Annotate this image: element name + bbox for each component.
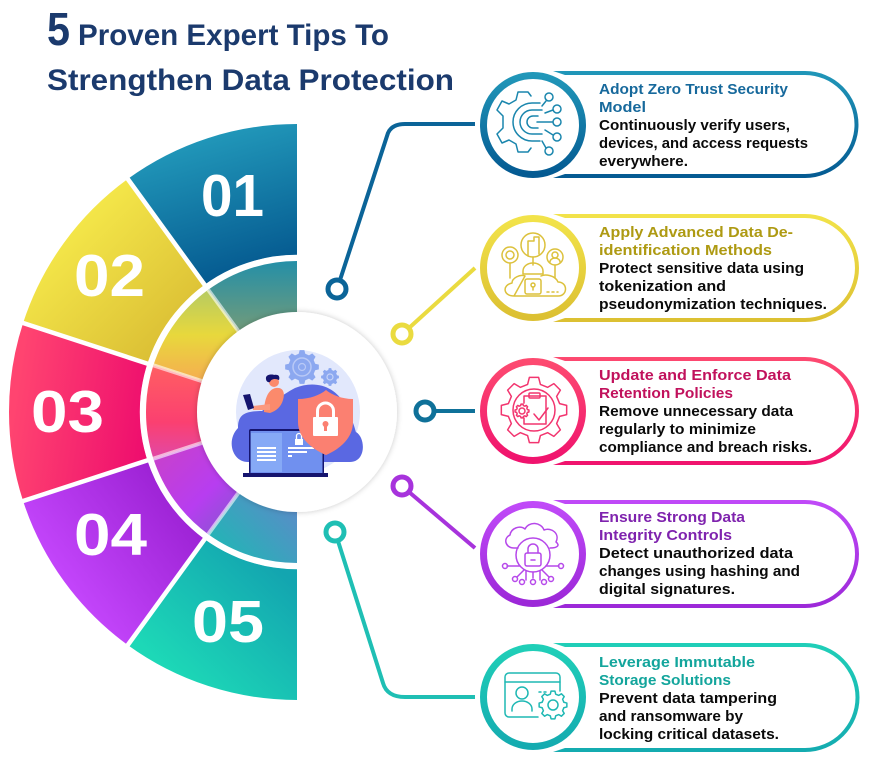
text: tip 4: Integrity Controls xyxy=(599,527,732,544)
icon: cloud lock network xyxy=(502,523,564,584)
center circle xyxy=(197,312,397,512)
text: tip 4: Ensure Strong Data xyxy=(599,509,746,526)
laptop xyxy=(249,429,324,474)
text: tip 5: Prevent data tampering xyxy=(599,690,777,707)
icon: cloud lock with data circles xyxy=(502,233,566,296)
segment 05: 05 xyxy=(192,589,264,655)
text: tip 5: Leverage Immutable xyxy=(599,654,755,671)
text: tip 1: everywhere. xyxy=(599,153,688,170)
text: tip 3: Update and Enforce Data xyxy=(599,367,792,384)
text: tip 4: Detect unauthorized data xyxy=(599,545,794,562)
icon: profile window with gear xyxy=(505,673,567,719)
panel: tip 2 de-identification xyxy=(484,214,859,322)
segment 01: 01 xyxy=(201,163,264,229)
panel: tip 4 data integrity xyxy=(484,500,859,608)
text: tip 1: Adopt Zero Trust Security xyxy=(599,81,789,98)
text: tip 4: digital signatures. xyxy=(599,581,735,598)
text: tip 5: and ransomware by xyxy=(599,708,744,725)
panel: tip 5 immutable storage xyxy=(484,643,859,752)
connector 5 xyxy=(326,523,475,697)
shield with padlock xyxy=(298,390,353,455)
text: tip 2: tokenization and xyxy=(599,278,726,295)
inner ring xyxy=(146,261,297,563)
text: tip 5 xyxy=(599,654,779,743)
segment 04: 04 xyxy=(74,502,147,568)
segment 03: 03 xyxy=(31,379,104,445)
title: Strengthen Data Protection xyxy=(47,64,454,97)
icon: gear circuit xyxy=(497,92,561,155)
segment 01 xyxy=(128,124,297,285)
connector 4 xyxy=(393,477,475,548)
connector 1 xyxy=(328,124,475,298)
connector 3 xyxy=(416,402,475,420)
text: tip 4 xyxy=(599,509,800,598)
text: tip 3: compliance and breach risks. xyxy=(599,439,812,456)
panel: tip 3 retention policies xyxy=(484,357,859,465)
semicircle chart xyxy=(9,124,397,700)
text: tip 4: changes using hashing and xyxy=(599,563,800,580)
text: tip 1: devices, and access requests xyxy=(599,135,808,152)
connector 2 xyxy=(393,268,475,343)
text: tip 2: pseudonymization techniques. xyxy=(599,296,827,313)
text: tip 3 xyxy=(599,367,812,456)
text: tip 2: Apply Advanced Data De- xyxy=(599,224,793,241)
text: tip 1 xyxy=(599,81,808,170)
segment 05 xyxy=(128,539,297,700)
person xyxy=(264,388,284,413)
segment 02: 02 xyxy=(74,243,145,309)
text: tip 2: identification Methods xyxy=(599,242,772,259)
text: tip 1: Model xyxy=(599,99,646,116)
text: tip 3: Remove unnecessary data xyxy=(599,403,794,420)
text: tip 3: regularly to minimize xyxy=(599,421,756,438)
segment 03 xyxy=(9,323,148,501)
icon: cloud security illustration xyxy=(232,350,363,477)
text: tip 5: locking critical datasets. xyxy=(599,726,779,743)
text: tip 5: Storage Solutions xyxy=(599,672,731,689)
text: tip 2 xyxy=(599,224,827,313)
title xyxy=(47,3,454,97)
icon: gear with clipboard xyxy=(501,377,567,443)
segment 04 xyxy=(23,460,205,645)
text: tip 3: Retention Policies xyxy=(599,385,733,402)
panel: tip 1 zero trust xyxy=(484,71,858,178)
text: tip 2: Protect sensitive data using xyxy=(599,260,804,277)
text: tip 1: Continuously verify users, xyxy=(599,117,790,134)
title: Proven Expert Tips To xyxy=(78,19,389,52)
title: 5 xyxy=(47,3,70,55)
segment 02 xyxy=(23,179,205,364)
